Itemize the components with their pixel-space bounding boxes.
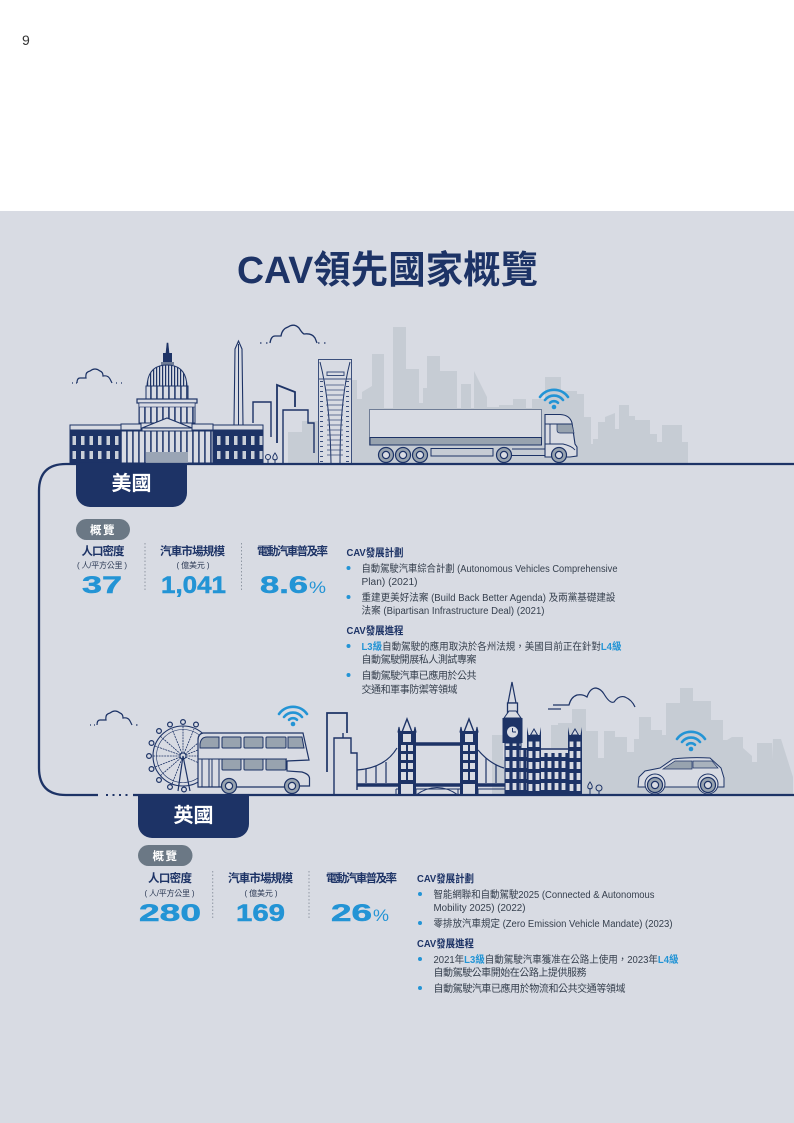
pill: UK overview: 概覽 bbox=[152, 849, 178, 863]
main route line USA bbox=[39, 464, 794, 795]
title: CAV領先國家概覽 bbox=[237, 250, 538, 292]
text block: UK CAV progress bbox=[417, 937, 678, 995]
tab: UK bbox=[138, 795, 249, 838]
illustration: Big Ben and Parliament bbox=[502, 682, 582, 795]
pill: USA overview bbox=[76, 519, 130, 540]
dome bbox=[147, 365, 187, 386]
stat: UK population density: 280 bbox=[139, 900, 201, 927]
tab: USA bbox=[76, 464, 187, 507]
lower windows bbox=[222, 759, 286, 770]
Parliament hall bbox=[521, 748, 582, 795]
upper windows bbox=[200, 737, 304, 748]
text block: USA CAV plans: 法案 (Bipartisan Infrastructure Deal) (2021) bbox=[362, 604, 544, 617]
door and trim bbox=[198, 759, 290, 787]
upper drum bbox=[146, 386, 188, 399]
illustration: car bbox=[638, 758, 724, 794]
cab bbox=[545, 414, 577, 457]
stat: USA EV penetration: % bbox=[309, 578, 326, 597]
background skyline: UK bbox=[492, 688, 793, 795]
dividers USA bbox=[145, 543, 242, 592]
bus wheels bbox=[222, 778, 300, 794]
text block: UK CAV plans bbox=[417, 872, 672, 930]
text block: USA CAV progress: 交通和軍事防禦等領域 bbox=[362, 683, 458, 696]
Parliament towers bbox=[527, 727, 582, 795]
stat: USA car market bbox=[160, 544, 226, 599]
car windows bbox=[663, 761, 718, 769]
text block: USA CAV plans: Plan) (2021) bbox=[362, 577, 418, 588]
Big Ben bbox=[502, 682, 522, 795]
text block: UK CAV plans: 智能網聯和自動駕駛2025 (Connected & Autonomous bbox=[434, 888, 654, 901]
central portico bbox=[121, 418, 213, 463]
pill: USA overview: 概覽 bbox=[90, 523, 116, 537]
illustration: Ferris wheel bbox=[147, 720, 213, 792]
icon: wifi bus bbox=[279, 707, 307, 726]
deck and cables bbox=[357, 744, 505, 795]
text block: USA CAV progress: 自動駕駛開展私人測試專案 bbox=[362, 653, 476, 666]
text block: USA CAV plans: CAV發展計劃 bbox=[346, 546, 404, 559]
illustration: outline buildings UK bbox=[327, 713, 357, 795]
text block: UK CAV plans: 零排放汽車規定 (Zero Emission Vehicle Mandate) (2023) bbox=[434, 917, 672, 930]
trailer bbox=[370, 410, 542, 445]
pill: UK overview bbox=[138, 845, 192, 866]
dividers UK bbox=[213, 871, 309, 920]
route line UK bbox=[106, 794, 794, 796]
stat: UK EV penetration: % bbox=[373, 906, 389, 925]
illustration: US Capitol bbox=[70, 343, 263, 463]
illustration: Washington Monument bbox=[234, 341, 243, 425]
car body bbox=[638, 758, 724, 787]
stat: USA EV penetration: 電動汽車普及率 bbox=[257, 544, 328, 558]
text block: USA CAV progress: L3級自動駕駛的應用取決於各州法規，美國目前正在針對L4級 bbox=[362, 640, 622, 653]
stat: UK car market: 汽車市場規模 bbox=[228, 871, 294, 885]
stat: USA population density: 人口密度 bbox=[82, 544, 125, 558]
illustration: skyscraper bbox=[318, 360, 352, 464]
text block: USA CAV progress: CAV發展進程 bbox=[346, 624, 404, 637]
stat: UK EV penetration: 26 bbox=[331, 900, 372, 927]
text block: UK CAV progress: 2021年L3級自動駕駛汽車獲准在公路上使用，2023年L4級 bbox=[434, 953, 678, 966]
text block: UK CAV progress: CAV發展進程 bbox=[417, 937, 474, 950]
stat: USA car market: ( 億美元 ) bbox=[176, 560, 210, 570]
tab: USA: 美國 bbox=[112, 472, 152, 495]
stat: UK EV penetration bbox=[326, 871, 398, 927]
text block: UK CAV plans: CAV發展計劃 bbox=[417, 872, 474, 885]
cloud: USA left bbox=[72, 369, 122, 383]
text block: USA CAV plans: 自動駕駛汽車綜合計劃 (Autonomous Vehicles Comprehensive bbox=[362, 562, 618, 575]
illustration: truck bbox=[370, 410, 577, 462]
illustration: double-decker bus bbox=[198, 733, 310, 794]
bus body bbox=[198, 733, 310, 787]
stat: UK EV penetration: 電動汽車普及率 bbox=[326, 871, 398, 885]
car wheels bbox=[645, 774, 718, 794]
stat: USA car market: 1,041 bbox=[161, 572, 226, 599]
text block: USA CAV plans bbox=[346, 546, 618, 617]
stat: UK population density: 人口密度 bbox=[148, 871, 192, 885]
stat: USA car market: 汽車市場規模 bbox=[160, 544, 226, 558]
right wing bbox=[213, 425, 263, 463]
icon: trees UK bbox=[588, 782, 602, 795]
stat: USA population density: 37 bbox=[82, 572, 122, 599]
cloud: USA upper bbox=[260, 325, 326, 343]
stat: UK population density: ( 人/平方公里 ) bbox=[144, 888, 195, 898]
stat: UK car market: 169 bbox=[236, 900, 285, 927]
icon: wifi truck bbox=[540, 390, 568, 409]
illustration: outline buildings USA bbox=[253, 385, 314, 463]
tab: UK: 英國 bbox=[174, 804, 214, 827]
illustration: Tower Bridge bbox=[357, 719, 505, 795]
text block: UK CAV plans: Mobility 2025) (2022) bbox=[434, 903, 526, 914]
cloud: UK left bbox=[90, 711, 138, 725]
lower drum bbox=[137, 399, 197, 423]
cloud: UK right bbox=[548, 688, 635, 709]
icon: trees USA bbox=[266, 453, 277, 463]
text block: UK CAV progress: 自動駕駛汽車已應用於物流和公共交通等領域 bbox=[434, 982, 626, 995]
bridge towers bbox=[398, 719, 478, 795]
wheels bbox=[378, 448, 566, 462]
icon: wifi car bbox=[677, 732, 705, 751]
text block: UK CAV progress: 自動駕駛公車開始在公路上提供服務 bbox=[434, 966, 586, 979]
stat: USA EV penetration bbox=[257, 544, 328, 599]
stat: USA EV penetration: 8.6 bbox=[260, 572, 308, 599]
page number: 9 bbox=[22, 32, 30, 48]
chassis bbox=[431, 448, 545, 456]
text block: USA CAV plans: 重建更美好法案 (Build Back Better Agenda) 及兩黨基礎建設 bbox=[362, 591, 616, 604]
stat: UK car market: ( 億美元 ) bbox=[244, 888, 278, 898]
stat: UK car market bbox=[228, 871, 294, 927]
stat: UK population density bbox=[139, 871, 201, 927]
text block: USA CAV progress bbox=[346, 624, 622, 696]
stat: USA population density: ( 人/平方公里 ) bbox=[77, 560, 127, 570]
left wing bbox=[70, 425, 121, 463]
statue and lantern bbox=[161, 343, 174, 365]
background skyline: USA bbox=[288, 327, 688, 463]
stat: USA population density bbox=[77, 544, 127, 599]
text block: USA CAV progress: 自動駕駛汽車已應用於公共 bbox=[362, 669, 476, 682]
